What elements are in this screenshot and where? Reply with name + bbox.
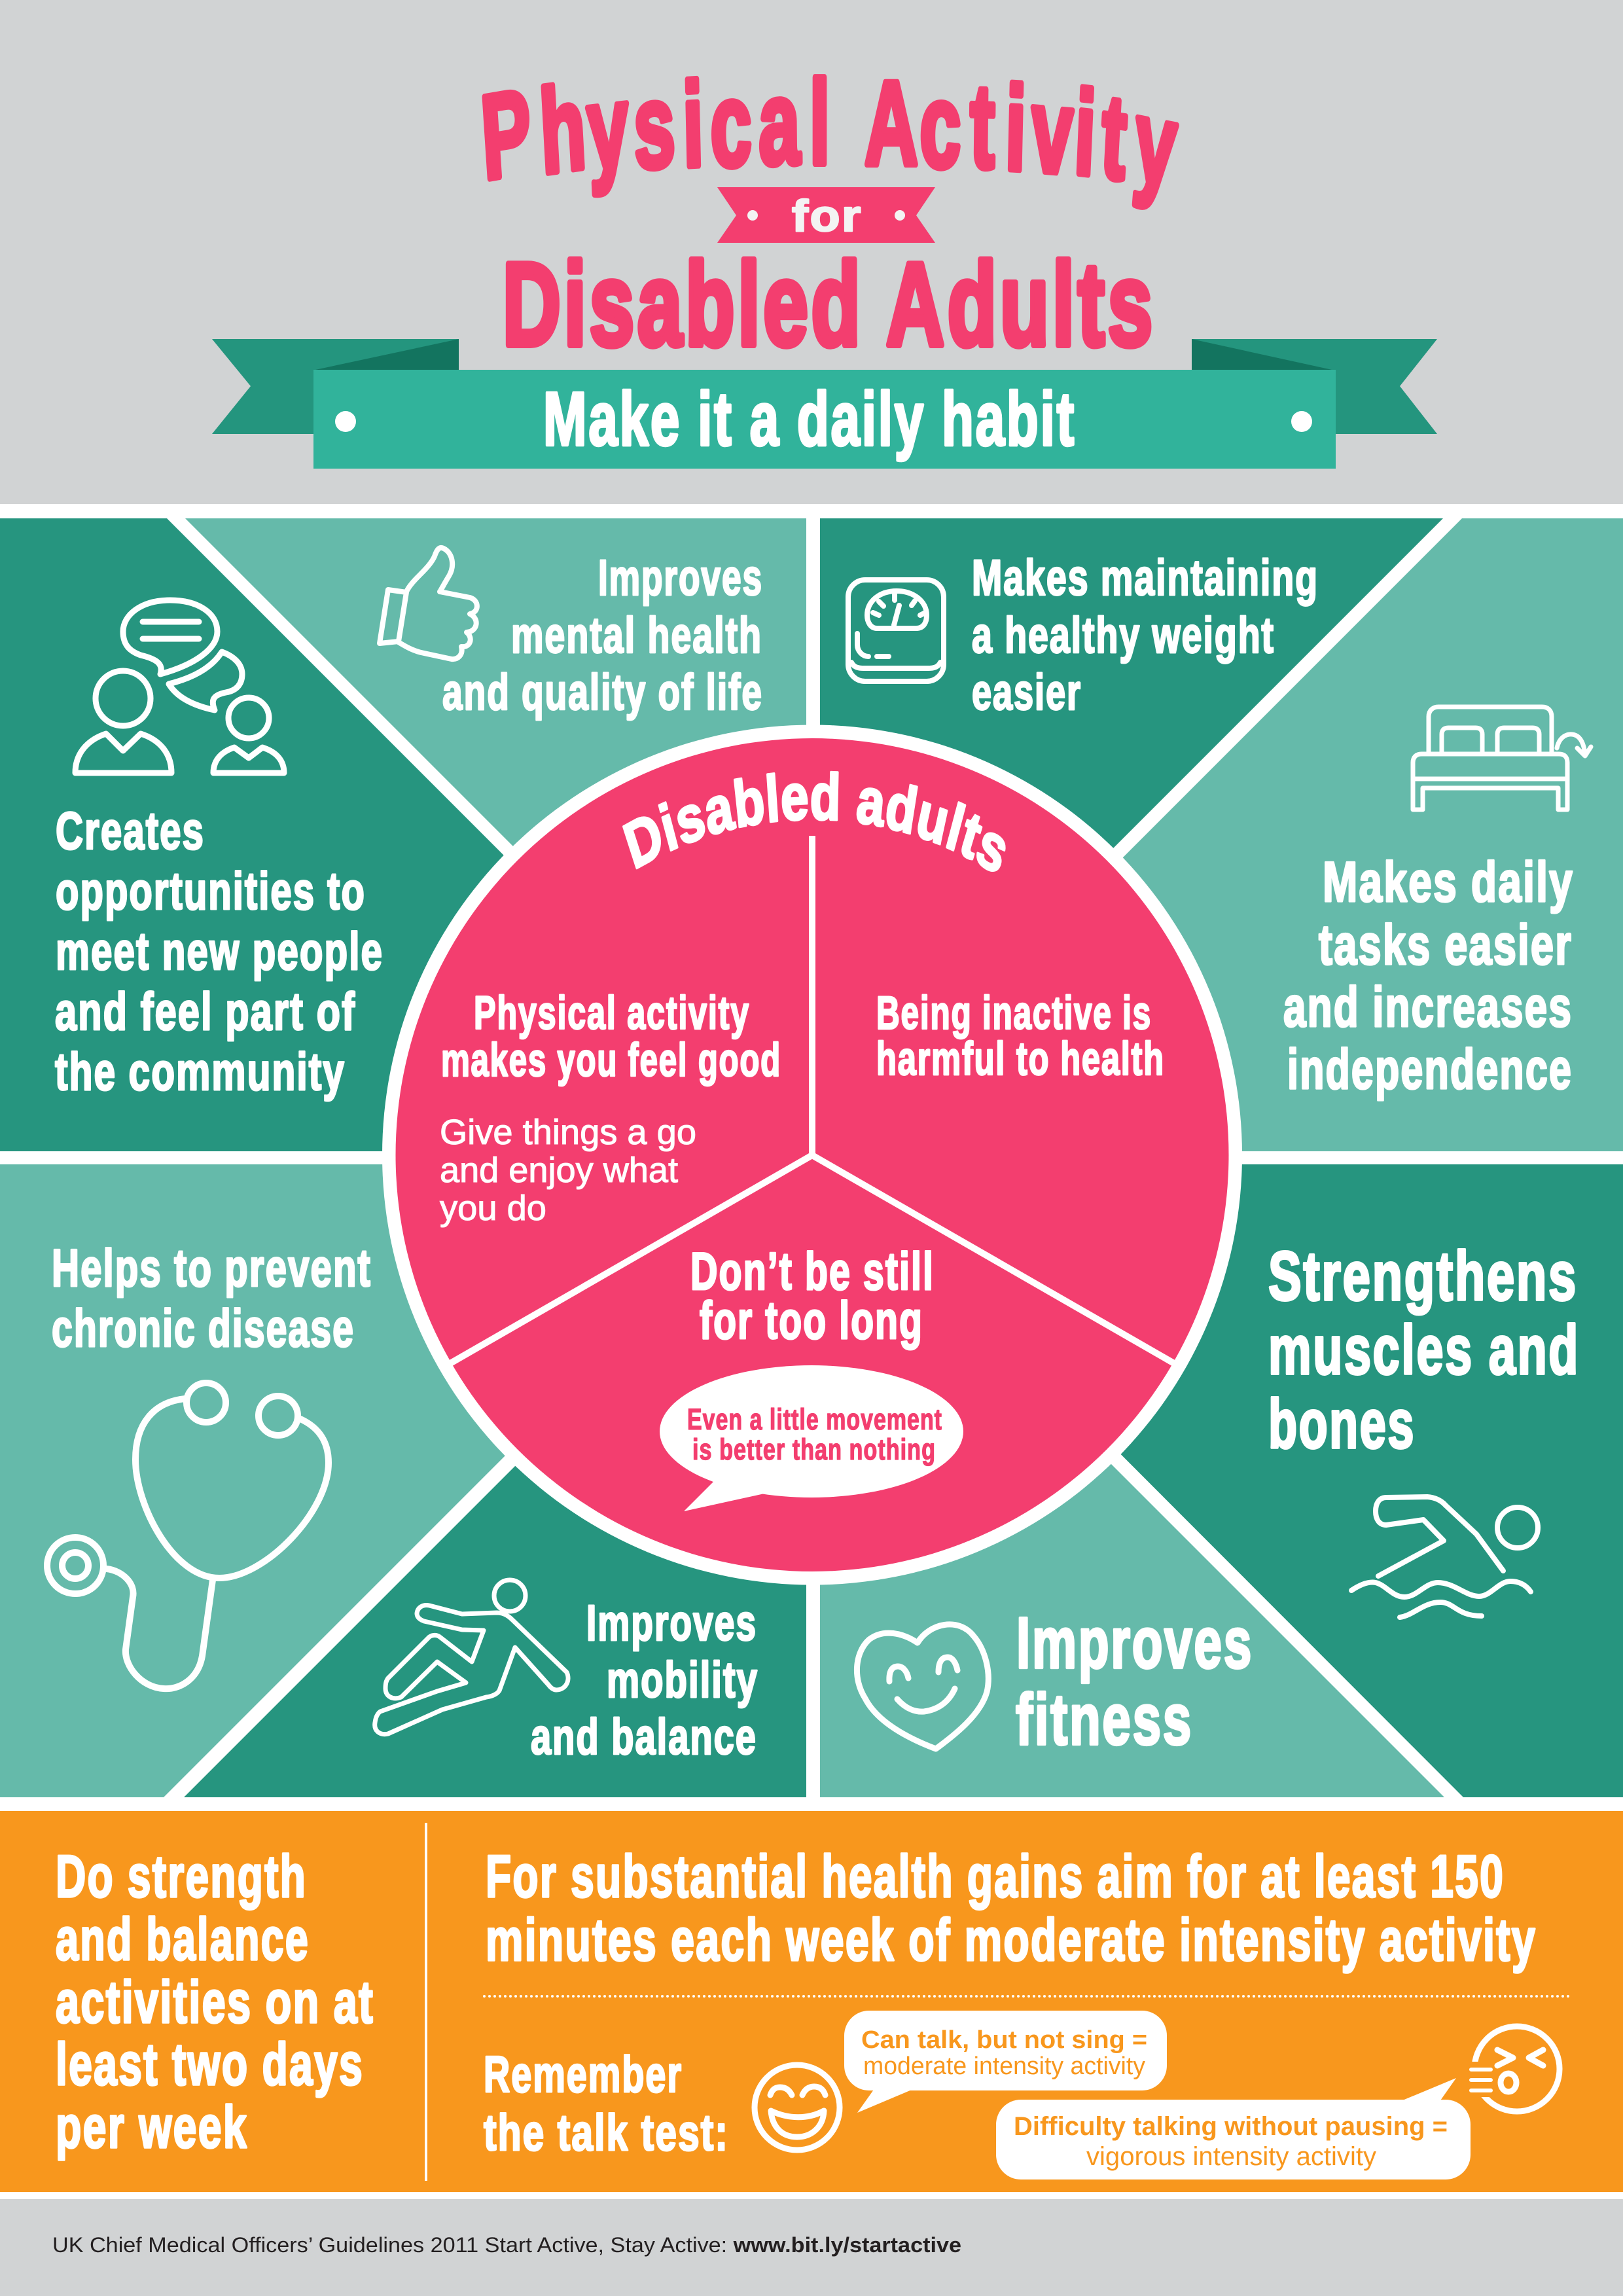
text: remember the talk test <box>484 2045 729 2161</box>
panel: daily tasks <box>916 518 1623 1151</box>
panel divider <box>425 1823 427 2181</box>
speech bubble: moderate intensity <box>844 2011 1167 2113</box>
icon: stethoscope <box>47 1383 329 1689</box>
citation text: UK Chief Medical Officers’ Guidelines 2011 Start Active, Stay Active: www.bit.ly/startactive <box>52 2233 961 2257</box>
text: strength and balance: least two days <box>56 2032 364 2098</box>
circle dividers <box>450 836 1174 1363</box>
text: strength and balance: activities on at <box>56 1969 374 2036</box>
panel: mobility and balance <box>184 1327 806 1797</box>
text: mental health: mental health <box>511 607 762 664</box>
text: remember the talk test: the talk test: <box>484 2104 729 2161</box>
text: mobility: and balance <box>531 1709 757 1765</box>
text: creates opportunities <box>55 802 383 1102</box>
banner ribbon: Make it a daily habit <box>543 376 1076 461</box>
segment: being inactive: harmful to health <box>876 1033 1165 1085</box>
speech bubble: vigorous intensity <box>996 2078 1471 2179</box>
panel: creates opportunities <box>0 518 654 1151</box>
circle heading: Disabled adults: Disabled adults <box>622 771 1006 872</box>
icon: smiling heart <box>857 1624 988 1749</box>
segment: being inactive <box>876 988 1165 1085</box>
footer <box>0 2199 1623 2296</box>
text: mobility: Improves <box>586 1595 757 1651</box>
text: creates opportunities: meet new people <box>56 922 383 981</box>
segment: physical activity: Physical activity <box>474 988 750 1039</box>
icon: bed <box>1413 707 1591 810</box>
icon: running figure <box>375 1580 568 1734</box>
panel: mental health <box>185 518 806 916</box>
text: healthy weight: easier <box>972 664 1082 721</box>
text: healthy weight: a healthy weight <box>972 607 1275 664</box>
text: fitness: Improves <box>1016 1603 1253 1683</box>
text: 150 minutes <box>486 1844 1537 1973</box>
text: creates opportunities: and feel part of <box>55 982 356 1041</box>
text: strength and balance: Do strength <box>56 1844 307 1910</box>
text: fitness <box>1016 1603 1253 1760</box>
panel: muscles and bones <box>916 1164 1623 1797</box>
text: mental health <box>442 550 763 721</box>
text: muscles and bones <box>1268 1238 1580 1463</box>
segment: physical activity: and enjoy what <box>440 1151 678 1190</box>
text: remember the talk test: Remember <box>484 2045 683 2103</box>
text: healthy weight: Makes maintaining <box>972 550 1319 606</box>
central circle <box>382 725 1242 1585</box>
orange panel <box>0 1811 1623 2192</box>
text: daily tasks <box>1283 851 1574 1101</box>
text: creates opportunities: Creates <box>56 802 205 861</box>
icon: people talking <box>75 600 284 773</box>
speech bubble: moderate intensity: Can talk, but not sing = <box>861 2026 1147 2054</box>
icon: breathless face <box>1466 2026 1560 2111</box>
panel: healthy weight <box>820 518 1443 914</box>
panel: chronic disease <box>0 1164 654 1797</box>
banner ribbon <box>212 339 1437 469</box>
icon: weighing scale <box>848 580 944 681</box>
dotted divider <box>484 1995 1570 1998</box>
text: muscles and bones: bones <box>1268 1386 1416 1463</box>
text: mobility <box>531 1595 758 1765</box>
icon: smiling face <box>755 2065 840 2150</box>
speech bubble: even a little movement: is better than nothing <box>692 1433 936 1466</box>
for ribbon: for <box>792 191 863 241</box>
for ribbon <box>717 187 935 243</box>
icon: thumbs up <box>380 548 477 659</box>
segment: don't be still: Don’t be still <box>690 1242 935 1301</box>
segment: physical activity: makes you feel good <box>441 1035 781 1086</box>
header panel <box>0 0 1623 504</box>
segment: physical activity <box>440 988 781 1228</box>
icon: swimmer <box>1351 1497 1538 1617</box>
text: strength and balance: and balance <box>56 1907 310 1973</box>
speech bubble: vigorous intensity: vigorous intensity activity <box>1086 2142 1376 2171</box>
text: chronic disease: chronic disease <box>52 1299 355 1358</box>
segment: physical activity: Give things a go <box>440 1113 696 1152</box>
panel: fitness <box>820 1374 1444 1797</box>
text: creates opportunities: the community <box>55 1043 346 1102</box>
title: Disabled Adults: Disabled Adults <box>503 239 1156 370</box>
segment: don't be still <box>690 1242 935 1350</box>
segment: physical activity: you do <box>440 1189 546 1228</box>
text: creates opportunities: opportunities to <box>56 862 366 921</box>
segment: being inactive: Being inactive is <box>876 988 1152 1039</box>
title: Physical Activity: Physical Activity <box>478 56 1181 214</box>
text: chronic disease: Helps to prevent <box>52 1239 372 1298</box>
text: mobility: mobility <box>607 1652 758 1708</box>
speech bubble: even a little movement <box>660 1365 963 1511</box>
segment: don't be still: for too long <box>700 1291 923 1350</box>
text: mental health: and quality of life <box>442 664 763 721</box>
text: fitness: fitness <box>1016 1679 1193 1760</box>
text: chronic disease <box>52 1239 372 1358</box>
text: strength and balance <box>56 1844 374 2161</box>
text: mental health: Improves <box>598 550 763 606</box>
text: strength and balance: per week <box>56 2094 248 2161</box>
speech bubble: even a little movement: Even a little movement <box>687 1403 942 1436</box>
speech bubble: vigorous intensity: Difficulty talking without pausing = <box>1014 2112 1448 2141</box>
text: healthy weight <box>972 550 1319 721</box>
speech bubble: moderate intensity: moderate intensity activity <box>863 2053 1145 2080</box>
